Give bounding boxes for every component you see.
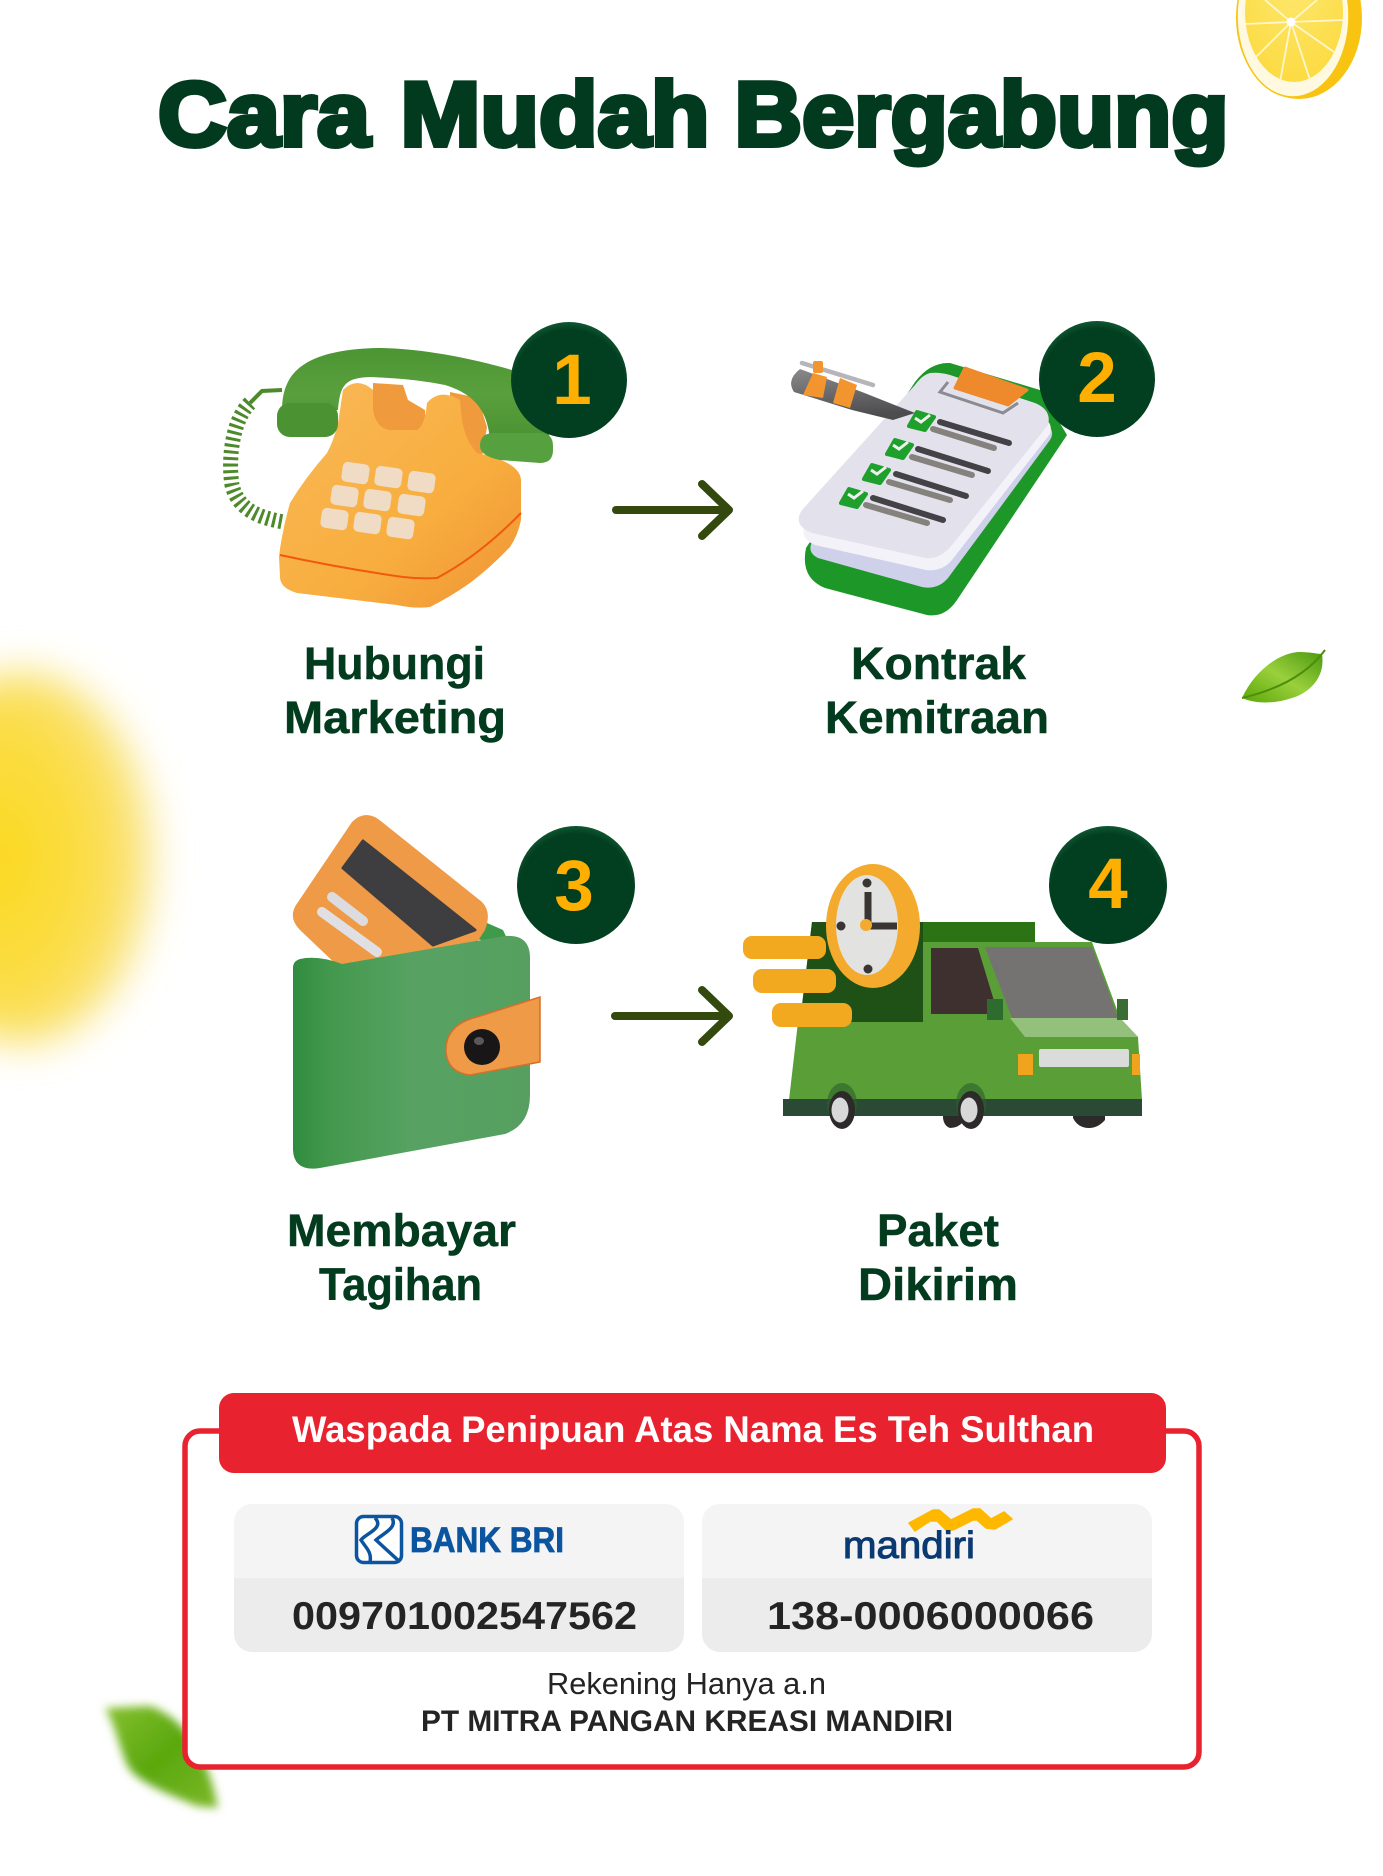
arrow 3 to 4 [615,990,729,1042]
logo: Mandiri [843,1509,1012,1567]
card: Mandiri [702,1504,1152,1652]
label: Kontrak Kemitraan: Kontrak [851,638,1027,689]
label: Kontrak Kemitraan: Kemitraan [825,692,1049,743]
badge 4: 4 [1088,845,1128,924]
icon: handset [277,348,553,463]
icon: van body [789,922,1142,1100]
account holder note [421,1666,953,1738]
step 3: wallet illustration [293,815,540,1169]
label: Paket Dikirim: Dikirim [858,1259,1018,1310]
card: Bank BRI [234,1504,684,1652]
icon: back of cradle [373,383,487,470]
account number BRI: 009701002547562 [292,1595,637,1638]
label: Paket Dikirim [858,1205,1018,1310]
header banner: Waspada Penipuan Atas Nama Es Teh Sulthan [292,1409,1094,1450]
logo: BRI: BANK BRI [410,1521,564,1560]
title: Mudah [400,64,710,166]
blurred lemon blob [0,672,152,1044]
badge 1 [511,322,627,438]
icon: green leaf [1242,650,1325,702]
icon: wheels and skirt [783,1083,1142,1129]
icon: wallet back [470,923,510,945]
panel: warning box [185,1393,1199,1767]
label: Hubungi Marketing: Marketing [284,692,506,743]
arrow 1 to 2 [616,484,729,536]
icon: keypad [320,461,436,540]
lemon slice [1236,0,1362,99]
logo: BRI [356,1516,564,1562]
label: Hubungi Marketing [284,638,506,743]
step 4: delivery van illustration [743,864,1142,1129]
label: Paket Dikirim: Paket [877,1205,999,1256]
badge 3: 3 [554,847,594,926]
logo: Mandiri: mandiri [843,1525,975,1567]
title [158,64,1228,166]
account number Mandiri: 138-0006000066 [767,1595,1094,1638]
icon: speed bars [743,936,852,1027]
icon: far wheels [943,1114,1105,1128]
account holder note: PT MITRA PANGAN KREASI MANDIRI [421,1705,953,1738]
title: Cara [158,64,371,166]
badge 3 [517,826,635,944]
panel outline [185,1431,1199,1767]
icon: coiled cord [231,390,284,522]
icon: clock [826,864,920,988]
label: Membayar Tagihan: Tagihan [319,1259,482,1310]
icon: clasp [446,997,540,1075]
header banner [219,1393,1166,1473]
icon: paper sheets [810,393,1052,588]
icon: clip [940,368,1027,413]
label: Kontrak Kemitraan [825,638,1049,743]
badge 2 [1039,321,1155,437]
title: Bergabung [734,64,1228,166]
label: Membayar Tagihan [287,1205,516,1310]
badge 2: 2 [1077,339,1117,418]
badge 4 [1049,826,1167,944]
icon: card [293,815,488,970]
label: Membayar Tagihan: Membayar [287,1205,516,1256]
icon: pen [791,361,915,420]
icon: wallet body [293,936,530,1169]
icon: green board [805,363,1067,615]
icon: blurred leaf [105,1706,218,1808]
icon: phone body [279,383,521,608]
label: Hubungi Marketing: Hubungi [304,638,485,689]
account holder note: Rekening Hanya a.n [547,1666,826,1701]
step 1: telephone illustration [231,348,553,608]
icon: checklist rows [841,412,1009,523]
step 2: contract clipboard illustration [791,361,1067,615]
badge 1: 1 [552,341,592,420]
